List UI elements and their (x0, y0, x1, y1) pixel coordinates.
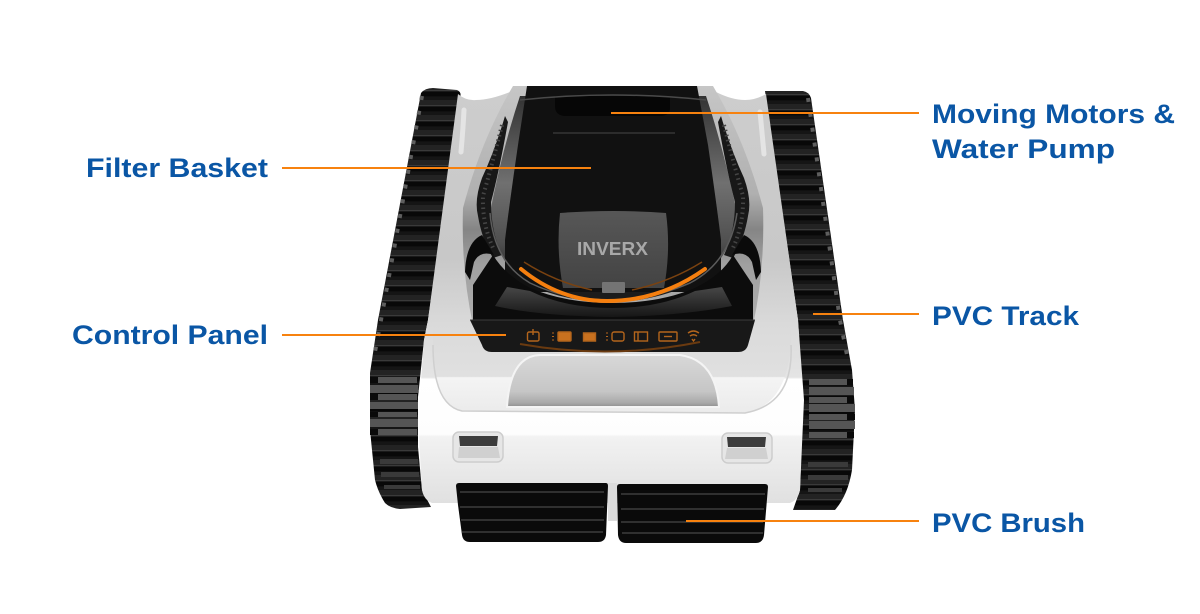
left side vents and swoosh (465, 116, 508, 280)
center divider (608, 483, 617, 521)
logo text: INVERX (577, 239, 648, 259)
left clip (453, 432, 503, 462)
label: moving motors and water pump: Water Pump (932, 134, 1115, 164)
left brush (456, 483, 608, 542)
label: moving motors and water pump: Moving Motors & (932, 99, 1175, 129)
white body shell (418, 92, 804, 503)
dome rim (490, 213, 737, 300)
label: control panel: Control Panel (72, 320, 268, 350)
control panel (470, 320, 755, 352)
filter basket dome (490, 86, 737, 302)
flank highlights (461, 110, 464, 152)
hood shell (463, 86, 763, 325)
lower black hood (473, 255, 753, 325)
leader line: control panel (282, 334, 506, 336)
right brush (617, 484, 768, 543)
gloss reflection (495, 287, 732, 317)
left PVC track (370, 88, 461, 509)
leader line: PVC brush (686, 520, 919, 522)
label: filter basket: Filter Basket (86, 153, 268, 183)
panel icons (528, 329, 699, 341)
leader line: PVC track (813, 313, 919, 315)
label: PVC brush: PVC Brush (932, 508, 1085, 538)
orange light strip (521, 269, 705, 301)
INVERX logo plate (559, 211, 668, 288)
right side vents and swoosh (718, 116, 761, 280)
right PVC track (765, 91, 855, 510)
leader line: filter basket (282, 167, 591, 169)
label: moving motors and water pump (932, 99, 1175, 164)
right clip (722, 433, 772, 463)
hinge accents (524, 262, 702, 290)
label: PVC track: PVC Track (932, 301, 1080, 331)
handle recess (507, 355, 719, 407)
motor window (520, 95, 706, 133)
hinge latch (602, 282, 625, 293)
robot illustration (370, 86, 855, 543)
leader line: moving motors (611, 112, 919, 114)
recess under panel (433, 322, 791, 413)
